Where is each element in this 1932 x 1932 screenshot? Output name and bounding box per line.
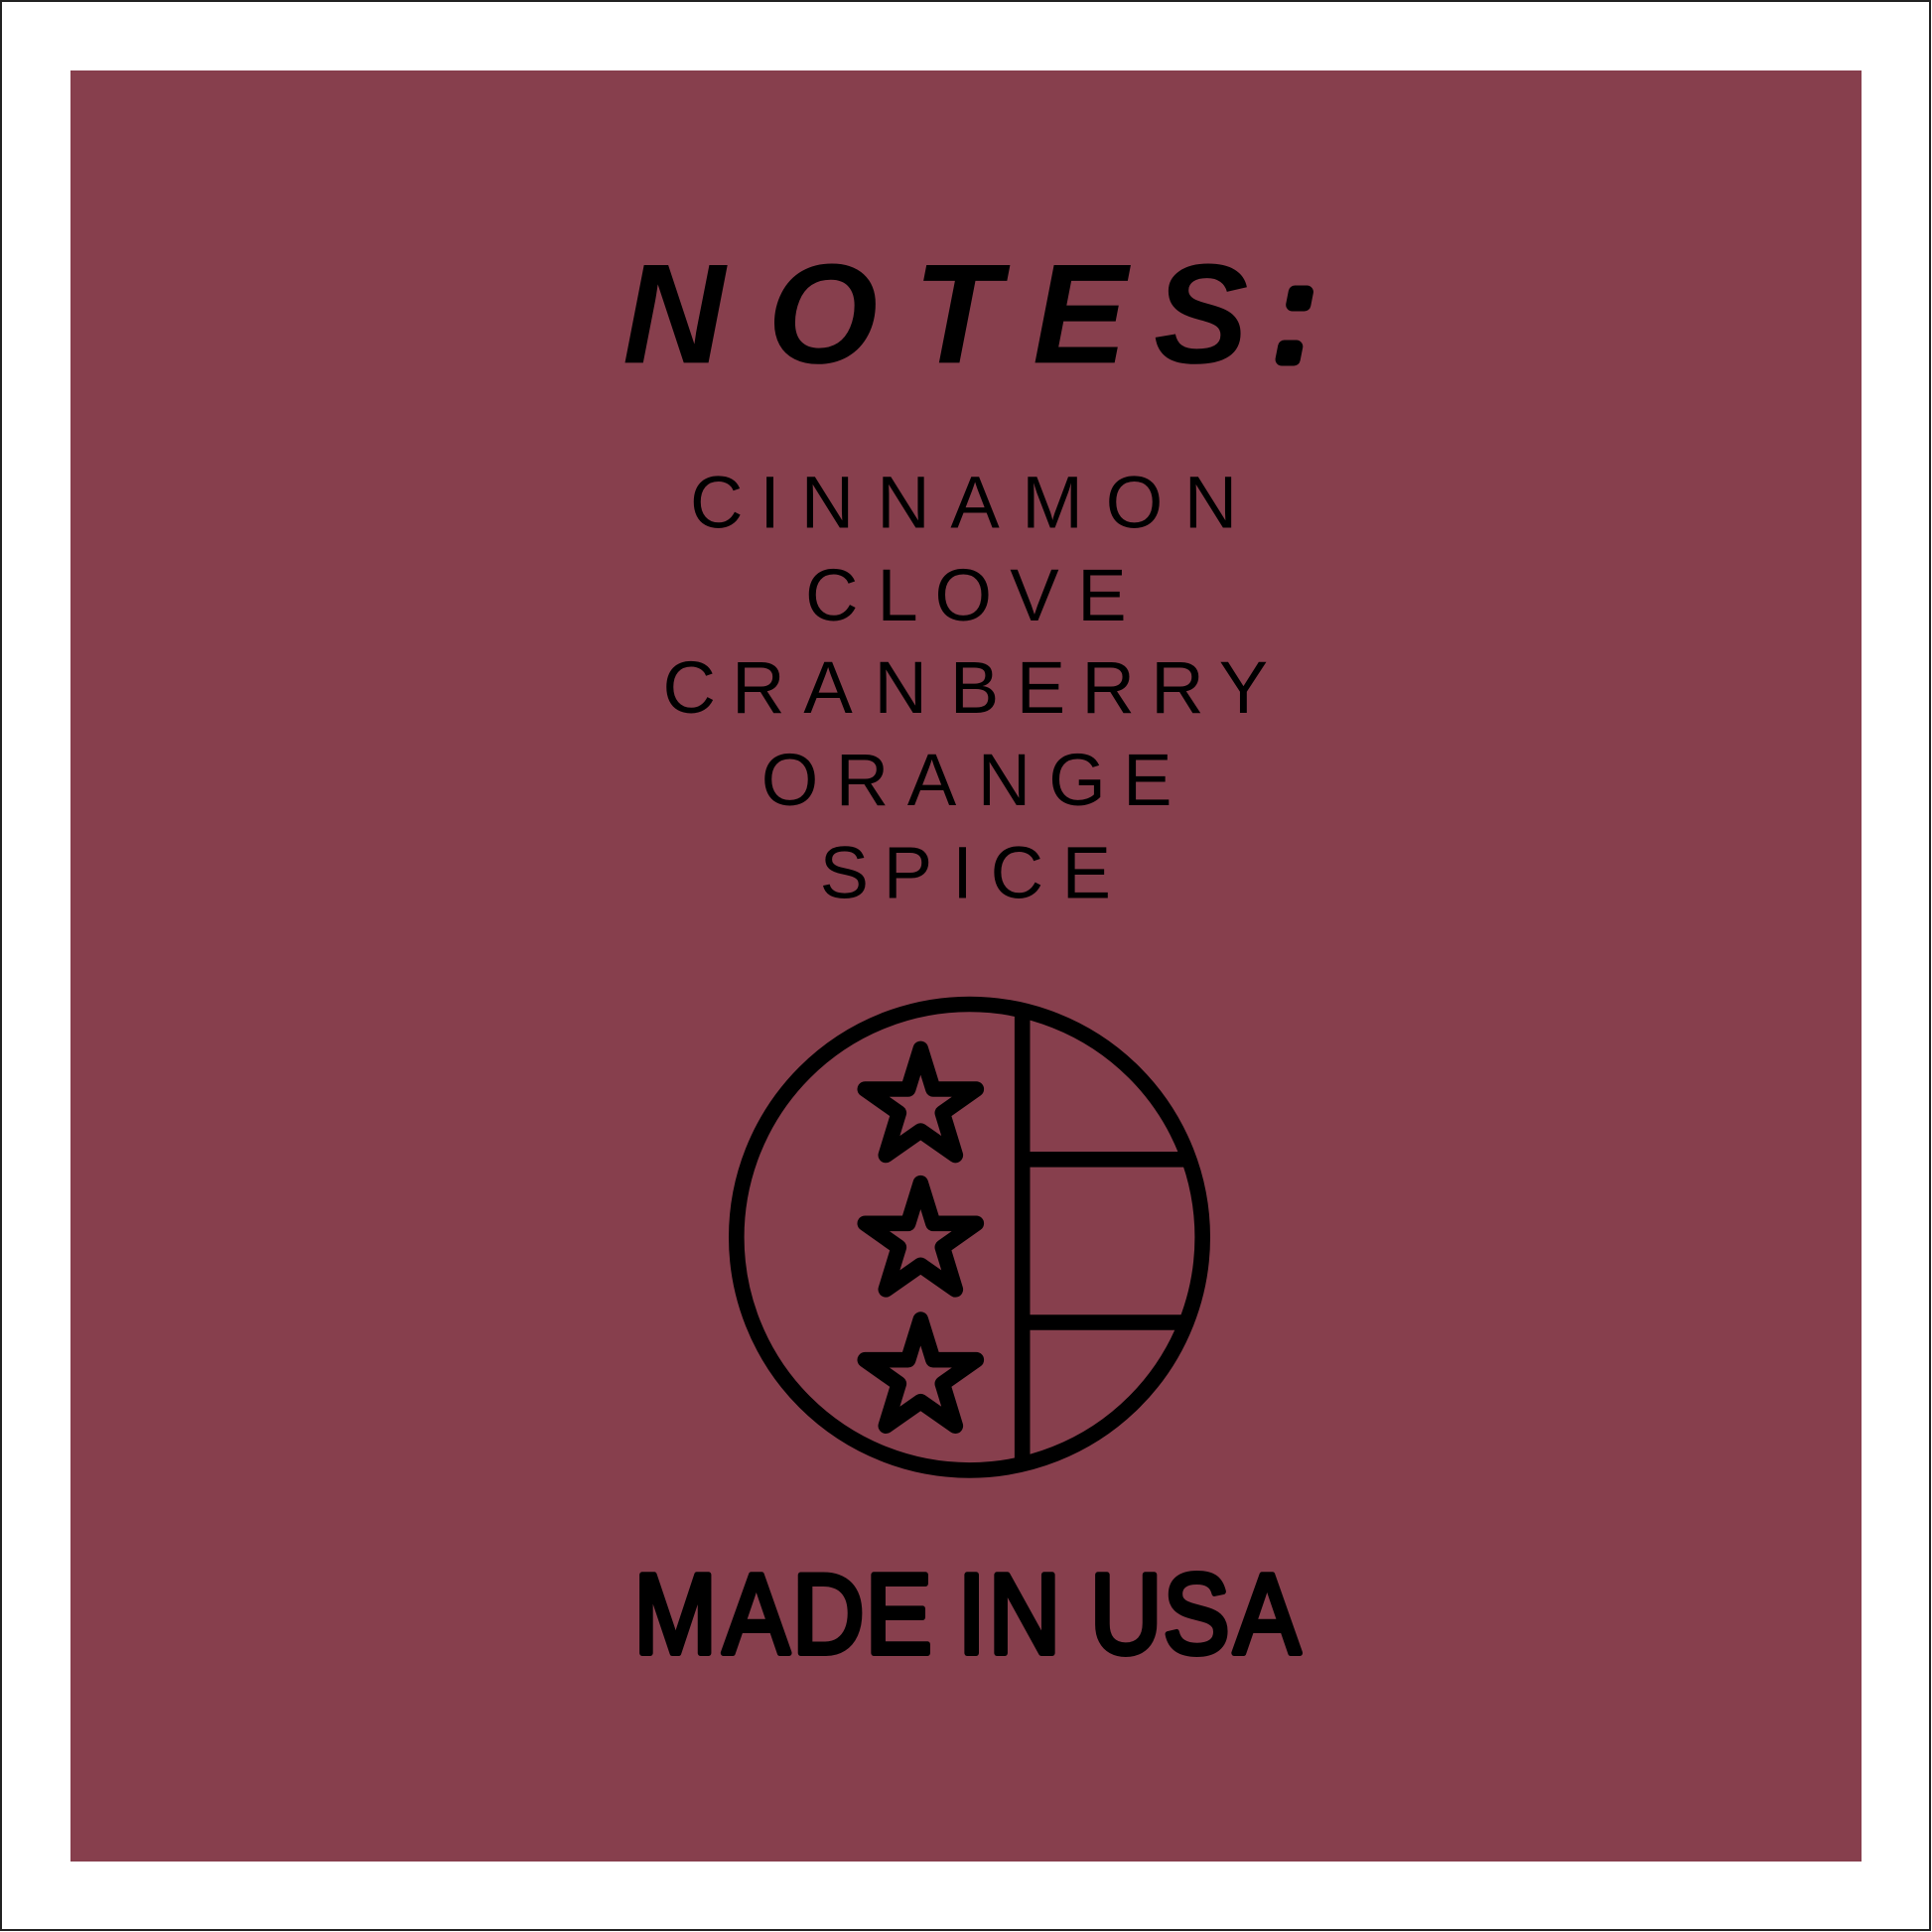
icon part: upper stripe	[1023, 1152, 1189, 1168]
note: clove: CLOVE	[805, 554, 1127, 636]
icon part: top star	[865, 1048, 976, 1156]
note: spice: SPICE	[820, 832, 1111, 914]
note: cranberry: CRANBERRY	[663, 646, 1268, 729]
note: cinnamon: CINNAMON	[690, 461, 1237, 544]
title: NOTES: :	[1277, 245, 1312, 387]
title: NOTES: NOTES	[622, 235, 1248, 393]
icon: circular American flag badge	[737, 1004, 1202, 1470]
icon part: vertical divider	[1015, 1010, 1030, 1464]
text block: list of scent notes	[663, 461, 1268, 914]
note: orange: ORANGE	[761, 739, 1172, 821]
icon part: circle outline	[737, 1004, 1202, 1470]
caption: MADE IN USA: MADEINUSA	[634, 1551, 1301, 1677]
icon part: lower stripe	[1023, 1314, 1186, 1330]
icon part: bottom star	[865, 1319, 976, 1426]
icon part: middle star	[865, 1183, 976, 1290]
